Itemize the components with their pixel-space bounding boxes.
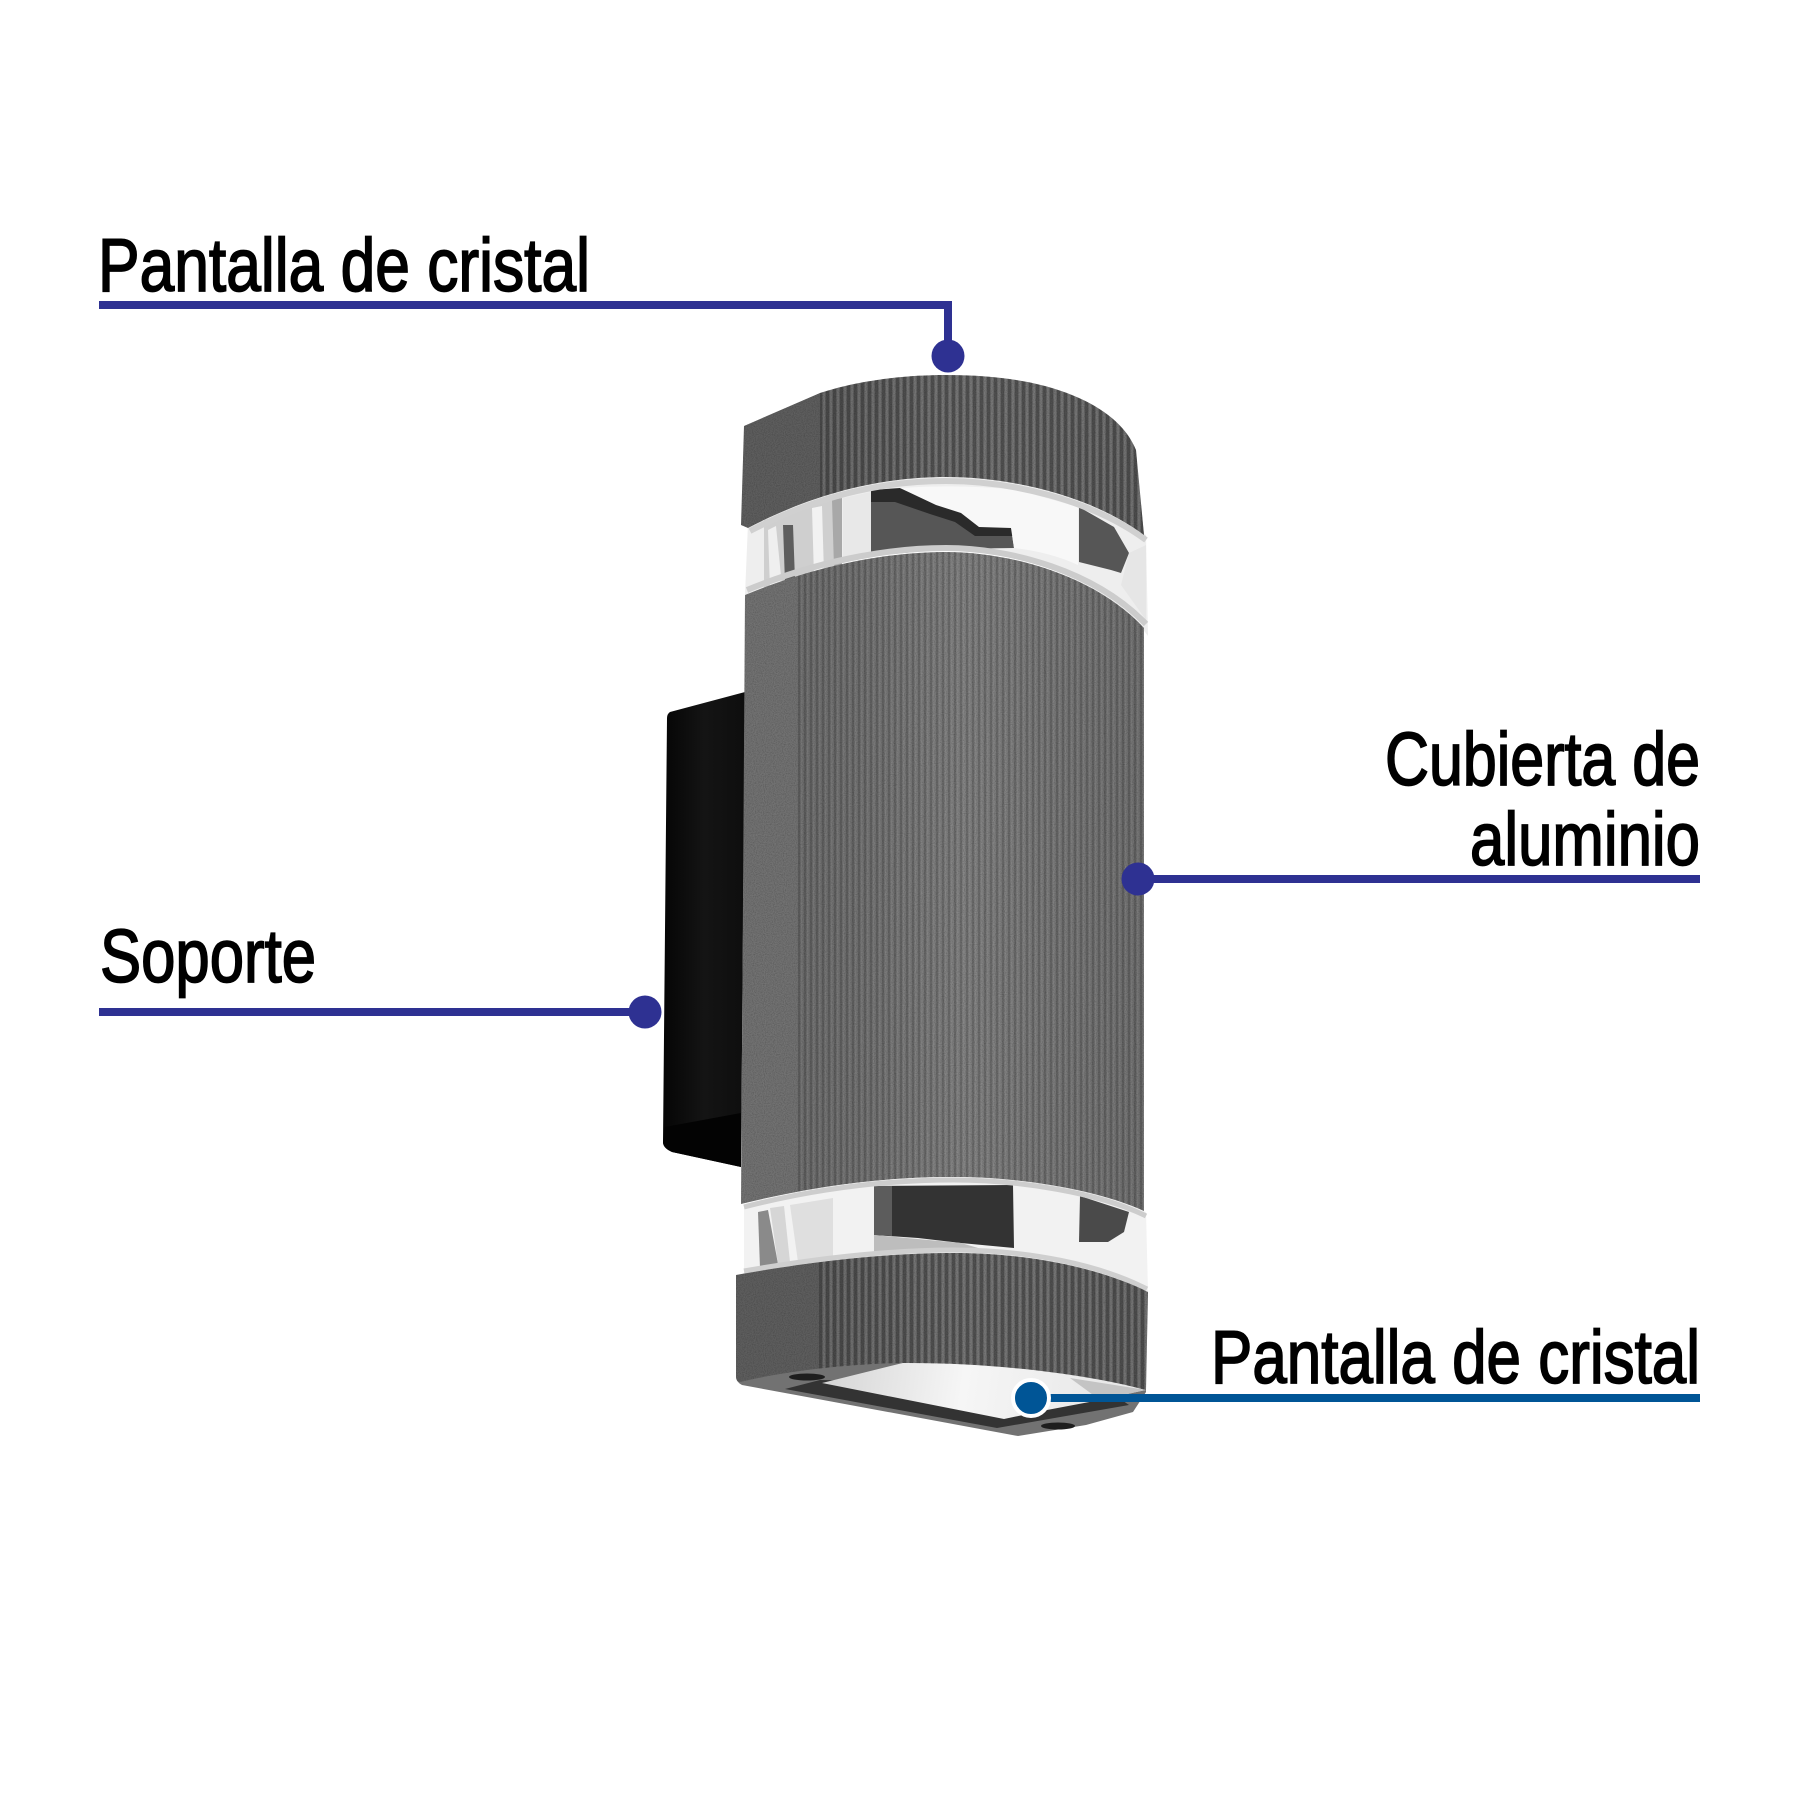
callout: bottom glass screen	[1013, 1315, 1700, 1416]
label: Cubierta de	[1385, 717, 1700, 801]
top cap	[735, 370, 1150, 540]
label: Pantalla de cristal	[1211, 1315, 1700, 1399]
marker dot	[932, 340, 964, 372]
marker dot	[628, 996, 662, 1028]
screw hole	[1041, 1422, 1075, 1430]
label line two: aluminio	[1470, 797, 1700, 881]
leader line	[1138, 875, 1700, 883]
bottom cap	[736, 1253, 1148, 1390]
main aluminium body	[740, 545, 1150, 1225]
callout: aluminium cover	[1122, 717, 1700, 896]
product: wall lamp	[663, 370, 1150, 1436]
upper glass band	[745, 473, 1148, 636]
label: Soporte	[100, 914, 316, 998]
bracket	[663, 692, 745, 1167]
lens	[822, 1360, 1146, 1419]
underside of lamp	[736, 1355, 1146, 1436]
callout: bracket	[99, 914, 662, 1028]
leader line	[1030, 1394, 1700, 1402]
leader line	[99, 305, 948, 356]
leader line	[99, 1008, 645, 1016]
label: Pantalla de cristal	[98, 223, 590, 307]
marker dot	[1122, 862, 1154, 896]
lower glass band	[744, 1177, 1148, 1292]
callout: top glass screen	[98, 223, 964, 372]
marker dot	[1013, 1380, 1049, 1416]
screw hole	[789, 1374, 825, 1380]
